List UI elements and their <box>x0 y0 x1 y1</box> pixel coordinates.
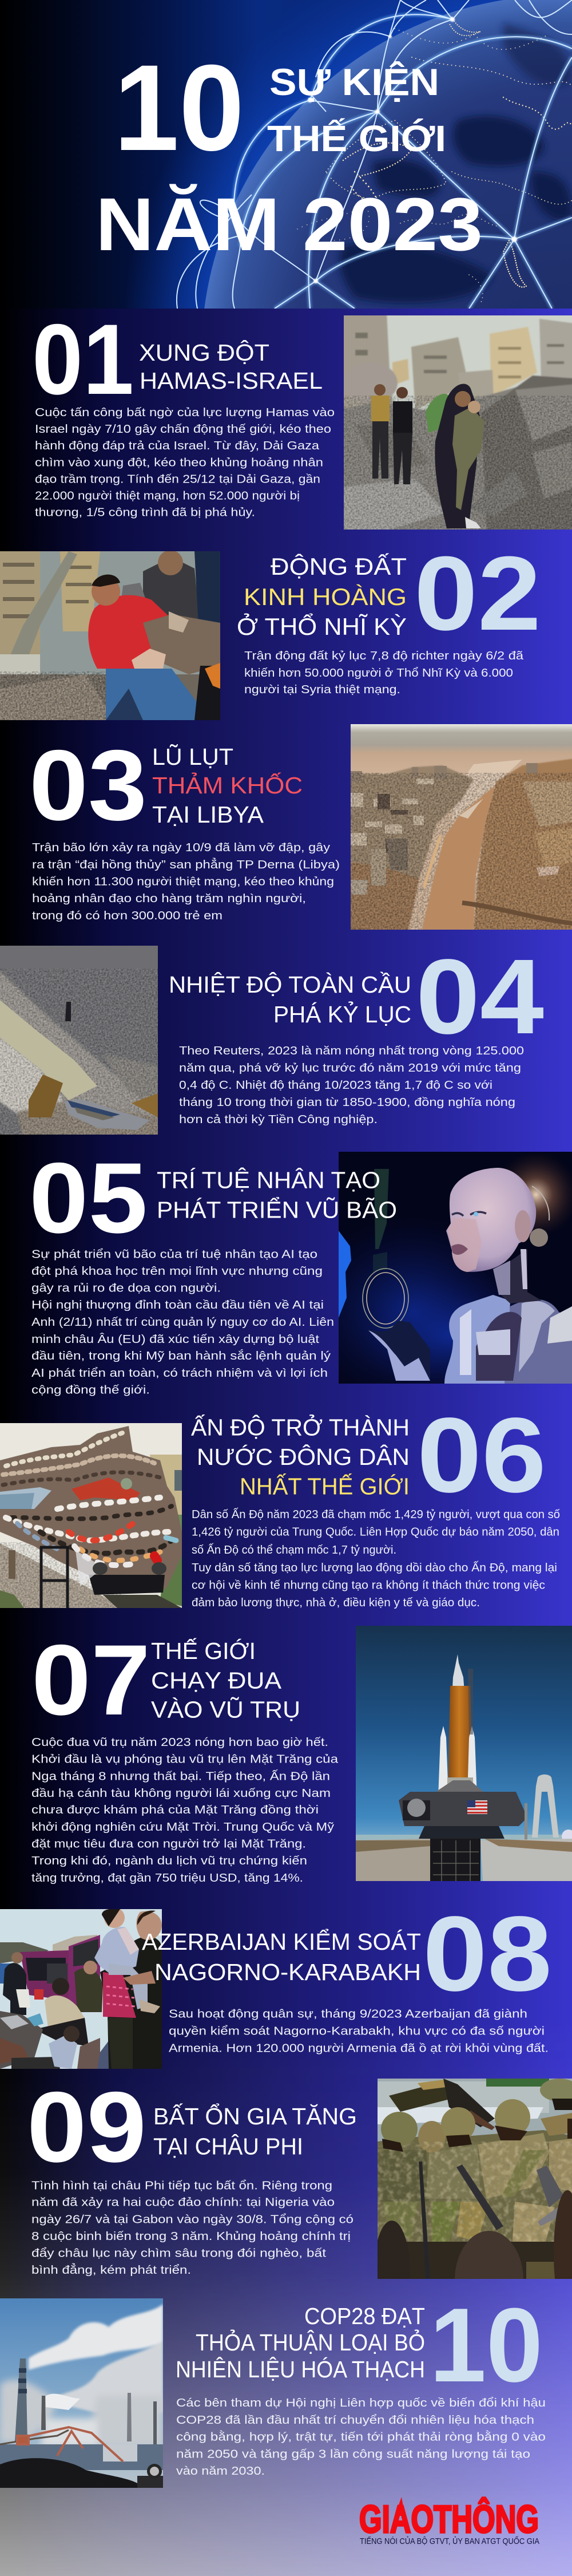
number 02: 02 <box>414 534 541 652</box>
panel: 07 space race <box>31 1625 572 1884</box>
heading: Lũ lụt thảm khốc tại Libya: THẢM KHỐC <box>152 772 303 799</box>
photo: earthquake rescuer <box>0 551 220 720</box>
body text 10: COP28 đã lần đầu nhất trí chuyển đổi nhiên liệu hóa thạch <box>176 2413 534 2427</box>
number 03: 03 <box>29 730 147 841</box>
heading: Ấn Độ trở thành nước đông dân nhất thế giới: NHẤT THẾ GIỚI <box>240 1473 410 1500</box>
body text 04 <box>179 1044 524 1126</box>
heading: Thế giới chạy đua vào vũ trụ <box>151 1638 300 1723</box>
number 08: 08 <box>423 1895 552 2013</box>
body text 05: cộng đồng thế giới. <box>31 1383 150 1397</box>
body text 04: 0,4 độ C. Nhiệt độ tháng 10/2023 tăng 1,7 độ C so với <box>179 1078 492 1092</box>
body text 07: Khởi đầu là vụ phóng tàu vũ trụ lên Mặt Trăng của <box>31 1753 339 1765</box>
heading: Ấn Độ trở thành nước đông dân nhất thế giới: NƯỚC ĐÔNG DÂN <box>197 1444 410 1470</box>
number 10: 10 <box>430 2286 543 2404</box>
body text 06: đảm bảo lương thực, nhà ở, điều kiện y tế và giáo dục. <box>192 1596 480 1609</box>
body text 05: Hội nghị thượng đỉnh toàn cầu đầu tiên về AI tại <box>31 1298 324 1311</box>
body text 09: ngày 26/7 và tại Gabon vào ngày 30/8. Tổng cộng có <box>31 2213 353 2226</box>
body text 06 <box>192 1508 560 1609</box>
heading: COP28 đạt thỏa thuận loại bỏ nhiên liệu hóa thạch <box>176 2303 425 2383</box>
number 09: 09 <box>27 2072 146 2183</box>
heading: Xung đột Hamas-Israel: XUNG ĐỘT <box>139 339 269 366</box>
photo: African soldiers <box>378 2079 572 2279</box>
body text 04: tháng 10 trong thời gian từ 1850-1900, đồng nghĩa nóng <box>179 1096 515 1109</box>
body text 03: khiến hơn 11.300 người thiệt mạng, kéo theo khủng <box>32 875 334 888</box>
title: 10 sự kiện thế giới năm 2023: NĂM 2023 <box>96 182 483 266</box>
body text 03: ra trận “đại hồng thủy” san phẳng TP Derna (Libya) <box>32 858 340 871</box>
heading: Lũ lụt thảm khốc tại Libya <box>152 744 303 828</box>
heading: COP28 đạt thỏa thuận loại bỏ nhiên liệu hóa thạch: COP28 ĐẠT <box>304 2303 425 2329</box>
network arcs <box>177 0 572 309</box>
panel: 05 artificial intelligence <box>29 1143 572 1409</box>
body text 10 <box>176 2396 546 2478</box>
heading: Trí tuệ nhân tạo phát triển vũ bão: PHÁT TRIỂN VŨ BÃO <box>157 1196 397 1223</box>
heading: COP28 đạt thỏa thuận loại bỏ nhiên liệu hóa thạch: THỎA THUẬN LOẠI BỎ <box>196 2329 425 2356</box>
body text 08 <box>169 2007 549 2055</box>
photo: Artemis rocket on the pad <box>356 1626 572 1881</box>
body text 10: năm 2050 và tăng gấp 3 lần công suất năng lượng tái tạo <box>176 2448 530 2460</box>
body text 03: hoảng nhân đạo cho hàng trăm nghìn người, <box>32 892 306 905</box>
body text 07: đặt mục tiêu đưa con người trở lại Mặt Trăng. <box>31 1838 306 1850</box>
body text 01: thương, 1/5 công trình đã bị phá hủy. <box>35 506 255 519</box>
number 05: 05 <box>29 1143 148 1254</box>
body text 03 <box>32 841 340 922</box>
body text 01: Israel ngày 7/10 gây chấn động thế giới, kéo theo <box>35 422 331 436</box>
body text 05 <box>31 1248 334 1397</box>
body text 05: đột phá khoa học trên mọi lĩnh vực nhưng cũng <box>31 1265 323 1278</box>
body text 02: khiến hơn 50.000 người ở Thổ Nhĩ Kỳ và 6.000 <box>244 666 513 679</box>
body text 05: gây ra rủi ro đe dọa con người. <box>31 1281 221 1295</box>
body text 10: Các bên tham dự Hội nghị Liên hợp quốc về biến đổi khí hậu <box>176 2396 546 2409</box>
body text 03: Trận bão lớn xảy ra ngày 10/9 đã làm vỡ đập, gây <box>32 841 331 854</box>
heading: Xung đột Hamas-Israel <box>139 339 323 394</box>
title: 10 sự kiện thế giới năm 2023: THẾ GIỚI <box>267 118 446 159</box>
heading: Thế giới chạy đua vào vũ trụ: VÀO VŨ TRỤ <box>151 1697 300 1723</box>
city lights <box>297 17 572 303</box>
hero background image: globe and network <box>35 0 572 309</box>
body text 04: năm qua, phá vỡ kỷ lục trước đó năm 2019 với mức tăng <box>179 1061 521 1074</box>
heading: Ấn Độ trở thành nước đông dân nhất thế giới: ẤN ĐỘ TRỞ THÀNH <box>191 1414 410 1440</box>
body text 09 <box>31 2179 353 2277</box>
body text 01: Cuộc tấn công bất ngờ của lực lượng Hamas vào <box>35 406 335 419</box>
body text 03: trong đó có hơn 300.000 trẻ em <box>32 909 223 922</box>
panel: 10 COP28 <box>0 2286 546 2488</box>
body text 09: Tình hình tại châu Phi tiếp tục bất ổn. Riêng trong <box>31 2179 332 2192</box>
panel: 03 Libya floods <box>29 724 572 933</box>
body text 06: Dân số Ấn Độ năm 2023 đã chạm mốc 1,429 tỷ người, vượt qua con số <box>192 1508 560 1521</box>
body text 05: AI phát triển an toàn, có trách nhiệm và vì lợi ích <box>31 1366 328 1380</box>
body text 07: chưa được khám phá của Mặt Trăng đồng thời <box>31 1803 319 1816</box>
body text 07: Nga tháng 8 nhưng thất bại. Tiếp theo, Ấn Độ lần <box>31 1770 330 1783</box>
heading: Động đất kinh hoàng ở Thổ Nhĩ Kỳ <box>237 553 407 640</box>
heading: Trí tuệ nhân tạo phát triển vũ bão: TRÍ TUỆ NHÂN TẠO <box>157 1167 380 1193</box>
photo: dried lake with boat <box>0 946 158 1135</box>
body text 04: Theo Reuters, 2023 là năm nóng nhất trong vòng 125.000 <box>179 1044 524 1057</box>
heading: Nhiệt độ toàn cầu phá kỷ lục <box>169 971 411 1028</box>
body text 04: hơn cả thời kỳ Tiền Công nghiệp. <box>179 1113 378 1126</box>
body text 09: 8 cuộc binh biến trong 3 năm. Khủng hoảng chính trị <box>31 2230 351 2243</box>
heading: Bất ổn gia tăng tại châu Phi <box>153 2103 357 2159</box>
heading: Thế giới chạy đua vào vũ trụ: CHẠY ĐUA <box>151 1667 282 1693</box>
body text 07: Trong khi đó, ngành du lịch vũ trụ chứng kiến <box>31 1854 307 1867</box>
title: 10 sự kiện thế giới năm 2023: 10 <box>114 39 244 176</box>
heading: Ấn Độ trở thành nước đông dân nhất thế giới <box>191 1414 410 1500</box>
heading: Trí tuệ nhân tạo phát triển vũ bão <box>157 1167 397 1223</box>
body text 06: 1,426 tỷ người của Trung Quốc. Liên Hợp Quốc dự báo năm 2050, dân <box>192 1525 559 1539</box>
body text 07: khởi động nghiên cứu Mặt Trời. Trung Quốc và Mỹ <box>31 1820 335 1834</box>
panel: 02 earthquake in Turkey <box>0 534 541 720</box>
heading: Nhiệt độ toàn cầu phá kỷ lục: NHIỆT ĐỘ TOÀN CẦU <box>169 971 411 998</box>
body text 10: vào năm 2030. <box>176 2464 265 2478</box>
photo: crowded train <box>0 1423 182 1608</box>
body text 08: quyền kiểm soát Nagorno-Karabakh, khu vực có đa số người <box>169 2024 545 2038</box>
body text 02: Trận động đất kỷ lục 7,8 độ richter ngày 6/2 đã <box>244 649 524 662</box>
panel: 04 global temperature <box>0 938 544 1137</box>
hero banner with night globe <box>0 0 572 796</box>
body text 07: đầu hạ cánh tàu không người lái xuống cực Nam <box>31 1787 331 1800</box>
body text 05: Anh (2/11) nhất trí cùng quản lý nguy cơ do AI. Liên <box>31 1315 334 1329</box>
body text 09: năm đã xảy ra hai cuộc đảo chính: tại Nigeria vào <box>31 2196 335 2208</box>
heading: Động đất kinh hoàng ở Thổ Nhĩ Kỳ: ĐỘNG ĐẤT <box>271 553 407 580</box>
photo: Gaza rubble <box>344 315 572 530</box>
heading: COP28 đạt thỏa thuận loại bỏ nhiên liệu hóa thạch: NHIÊN LIỆU HÓA THẠCH <box>176 2356 425 2383</box>
number 07: 07 <box>31 1625 150 1736</box>
body text 06: Tuy dân số tăng tạo lực lượng lao động dồi dào cho Ấn Độ, mang lại <box>192 1561 557 1574</box>
heading: Azerbaijan kiểm soát Nagorno-Karabakh: NAGORNO-KARABAKH <box>154 1959 421 1985</box>
body text 02: người tại Syria thiệt mạng. <box>244 683 400 696</box>
heading: Bất ổn gia tăng tại châu Phi: BẤT ỔN GIA TĂNG <box>153 2103 357 2129</box>
panel: 06 India population <box>0 1396 560 1609</box>
heading: Bất ổn gia tăng tại châu Phi: TẠI CHÂU PHI <box>153 2133 303 2159</box>
title: 10 sự kiện thế giới năm 2023: SỰ KIỆN <box>269 61 439 103</box>
heading: Lũ lụt thảm khốc tại Libya: TẠI LIBYA <box>152 801 264 828</box>
body text 06: số Ấn Độ có thể chạm mốc 1,7 tỷ người. <box>192 1543 396 1556</box>
photo: coal plant smoke <box>0 2298 163 2488</box>
heading: Thế giới chạy đua vào vũ trụ: THẾ GIỚI <box>151 1638 256 1664</box>
photo: Armenian refugees <box>0 1909 162 2069</box>
heading: Nhiệt độ toàn cầu phá kỷ lục: PHÁ KỶ LỤC <box>273 1001 411 1028</box>
logo: Giao Thông newspaper: TIẾNG NÓI CỦA BỘ GTVT, ỦY BAN ATGT QUỐC GIA <box>360 2536 539 2546</box>
body text 01: hành động đáp trả của Israel. Từ đây, Dải Gaza <box>35 439 320 452</box>
heading: Azerbaijan kiểm soát Nagorno-Karabakh: AZERBAIJAN KIỂM SOÁT <box>142 1928 421 1955</box>
number 04: 04 <box>416 938 544 1056</box>
panel: 08 Nagorno-Karabakh <box>0 1895 552 2069</box>
heading: Động đất kinh hoàng ở Thổ Nhĩ Kỳ: KINH HOÀNG <box>244 583 407 610</box>
body text 01: chìm vào xung đột, kéo theo khủng hoảng nhân <box>35 456 323 469</box>
body text 07: tăng trưởng, đạt gần 750 triệu USD, tăng 14%. <box>31 1871 303 1884</box>
body text 07 <box>31 1736 339 1884</box>
panel: 01 Hamas-Israel <box>32 304 572 533</box>
body text 05: minh châu Âu (EU) đã xúc tiến xây dựng bộ luật <box>31 1333 319 1346</box>
number 06: 06 <box>417 1396 546 1515</box>
body text 01: đạo trầm trọng. Tính đến 25/12 tại Dải Gaza, gần <box>35 473 320 485</box>
photo: Derna flood aerial <box>351 724 572 930</box>
heading: Động đất kinh hoàng ở Thổ Nhĩ Kỳ: Ở THỔ NHĨ KỲ <box>237 612 407 640</box>
photo: android woman <box>339 1152 572 1384</box>
body text 08: Sau hoạt động quân sự, tháng 9/2023 Azerbaijan đã giành <box>169 2007 527 2021</box>
body text 01: 22.000 người thiệt mạng, hơn 52.000 người bị <box>35 489 300 503</box>
panel: 09 Africa instability <box>27 2072 572 2329</box>
body text 02 <box>244 649 524 696</box>
heading: Azerbaijan kiểm soát Nagorno-Karabakh <box>142 1928 421 1985</box>
body text 08: Armenia. Hơn 120.000 người Armenia đã ồ ạt rời khỏi vùng đất. <box>169 2041 549 2055</box>
heading: Lũ lụt thảm khốc tại Libya: LŨ LỤT <box>152 744 233 770</box>
body text 05: đầu tiên, trong khi Mỹ ban hành sắc lệnh quản lý <box>31 1349 331 1362</box>
body text 05: Sự phát triển vũ bão của trí tuệ nhân tạo AI tạo <box>31 1248 317 1261</box>
heading: Xung đột Hamas-Israel: HAMAS-ISRAEL <box>140 368 323 394</box>
network arcs glow <box>234 14 572 309</box>
body text 01 <box>35 406 335 519</box>
body text 10: công bằng, hợp lý, trật tự, tiến tới phát thải ròng bằng 0 vào <box>176 2431 546 2443</box>
number 01: 01 <box>32 304 134 416</box>
body text 06: cơ hội về kinh tế nhưng cũng tạo ra không ít thách thức trong việc <box>192 1579 545 1591</box>
body text 07: Cuộc đua vũ trụ năm 2023 nóng hơn bao giờ hết. <box>31 1736 328 1749</box>
body text 09: đẩy châu lục này chìm sâu trong đói nghèo, bất <box>31 2246 326 2260</box>
title: 10 sự kiện thế giới năm 2023 <box>96 39 483 266</box>
body text 09: bình đẳng, kém phát triển. <box>31 2263 191 2277</box>
